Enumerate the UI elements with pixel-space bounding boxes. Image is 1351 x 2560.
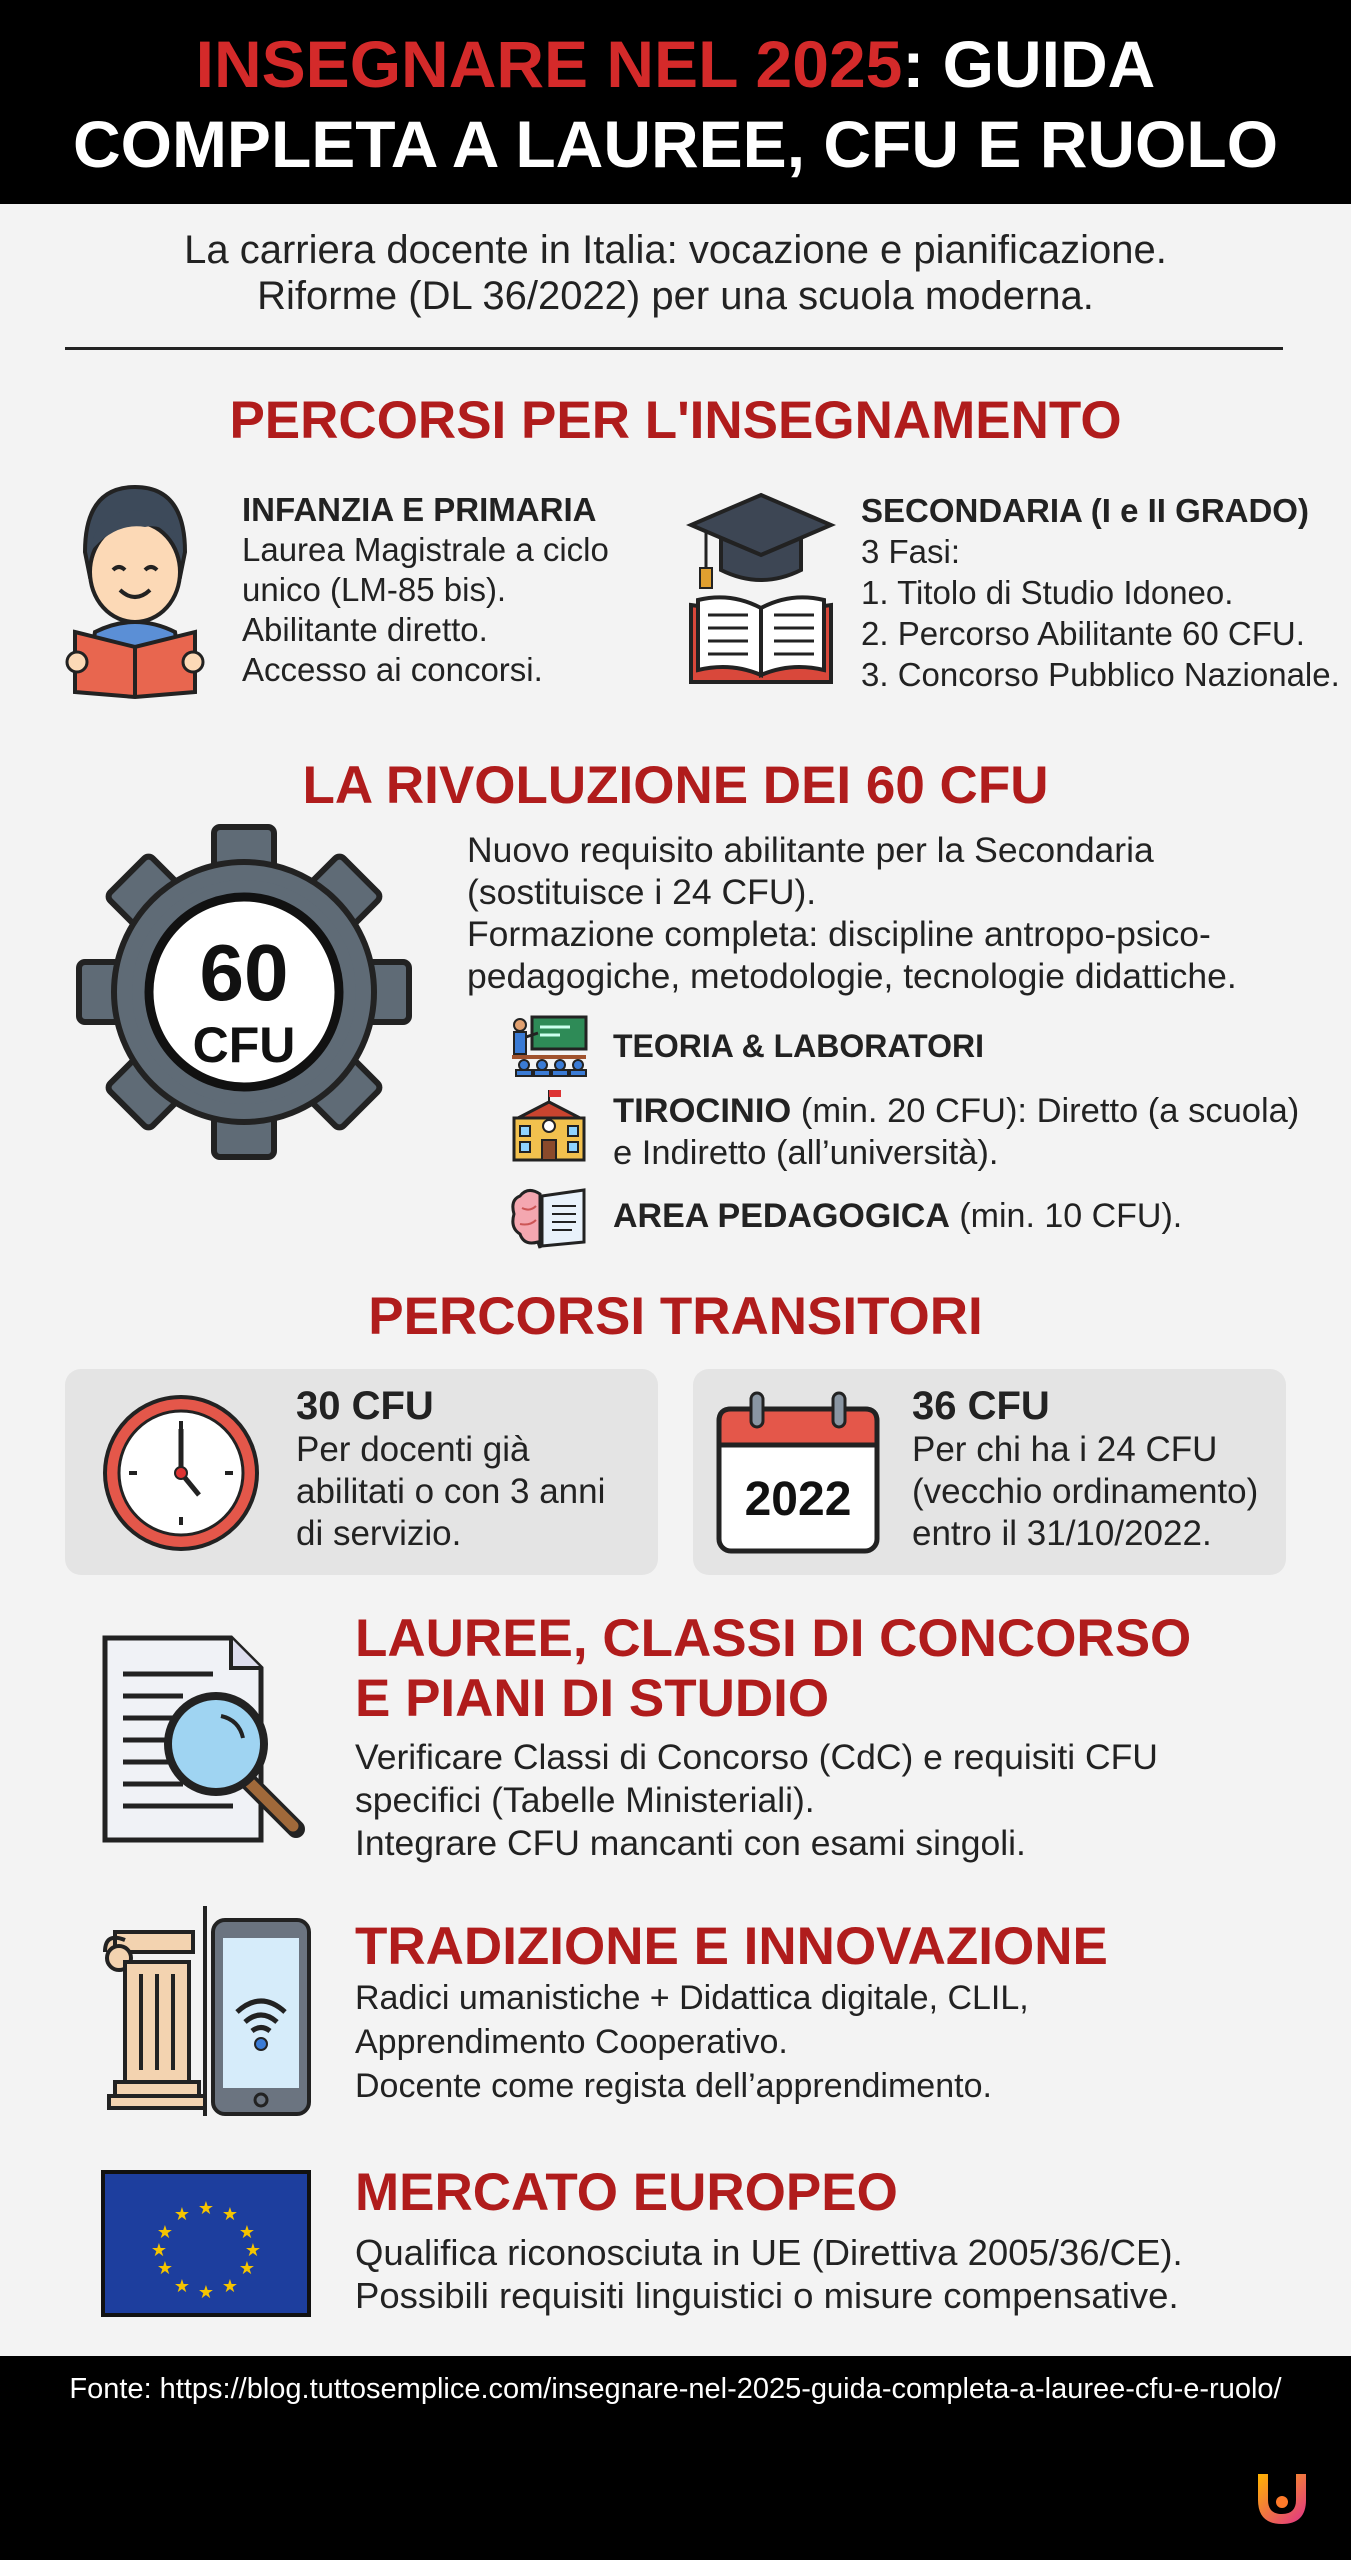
icon: document with magnifier [102, 1636, 305, 1842]
text: 36 CFU: entro il 31/10/2022. [912, 1514, 1212, 1553]
icon: teacher [512, 1016, 588, 1077]
text: tirocinio: e Indiretto (all’università). [613, 1134, 998, 1172]
text: infanzia e primaria: Abilitante diretto. [242, 611, 488, 648]
text: tradizione: Docente come regista dell’apprendimento. [355, 2067, 992, 2105]
text: infanzia e primaria: Accesso ai concorsi. [242, 651, 543, 688]
icon: child reading [66, 485, 204, 699]
text: teoria: TEORIA & LABORATORI [613, 1028, 984, 1064]
text: 60 CFU description: Formazione completa: discipline antropo-psico- [467, 914, 1211, 954]
icon: clock [103, 1395, 259, 1551]
text: secondaria [861, 492, 1340, 693]
icon: EU flag: ★ [151, 2240, 167, 2261]
heading: lauree: LAUREE, CLASSI DI CONCORSO [355, 1609, 1191, 1668]
icon: gear 60 CFU: CFU [193, 1017, 295, 1073]
heading: percorsi transitori: PERCORSI TRANSITORI [368, 1287, 983, 1346]
title: INSEGNARE NEL 2025: GUIDA [196, 27, 1155, 101]
card: 30 CFU [65, 1369, 658, 1575]
heading: lauree: E PIANI DI STUDIO [355, 1669, 829, 1728]
icon: gear 60 CFU [76, 824, 412, 1160]
text: 30 CFU [296, 1384, 605, 1553]
header band [0, 0, 1351, 204]
text: tirocinio [613, 1092, 1299, 1172]
text: tirocinio: TIROCINIO (min. 20 CFU): Diretto (a scuola) [613, 1092, 1299, 1130]
heading: tradizione: TRADIZIONE E INNOVAZIONE [355, 1917, 1108, 1976]
text: 30 CFU: di servizio. [296, 1514, 461, 1553]
icon: calendar 2022 [716, 1392, 880, 1554]
icon: EU flag: ★ [157, 2222, 173, 2243]
icon: school [512, 1090, 586, 1162]
icon: EU flag: ★ [222, 2204, 238, 2225]
text: mercato europeo [355, 2232, 1183, 2316]
icon: graduation cap and book [686, 492, 836, 684]
text: secondaria: 2. Percorso Abilitante 60 CFU. [861, 615, 1305, 652]
icon: EU flag: ★ [198, 2198, 214, 2219]
text: 36 CFU: (vecchio ordinamento) [912, 1472, 1258, 1511]
text: infanzia e primaria: unico (LM-85 bis). [242, 571, 506, 608]
icon: brain and book [511, 1188, 586, 1248]
text: 60 CFU description: (sostituisce i 24 CFU). [467, 872, 816, 912]
text: secondaria: 3. Concorso Pubblico Nazionale. [861, 656, 1340, 693]
text: mercato europeo: Qualifica riconosciuta in UE (Direttiva 2005/36/CE). [355, 2232, 1183, 2273]
text: mercato europeo: Possibili requisiti linguistici o misure compensative. [355, 2275, 1179, 2316]
title: COMPLETA A LAUREE, CFU E RUOLO [73, 107, 1278, 181]
title [73, 27, 1278, 181]
text: secondaria: 1. Titolo di Studio Idoneo. [861, 574, 1233, 611]
subtitle: La carriera docente in Italia: vocazione e pianificazione. [184, 228, 1167, 272]
icon: column and tablet [103, 1906, 311, 2116]
icon: EU flag: ★ [222, 2276, 238, 2297]
text: 30 CFU: 30 CFU [296, 1384, 434, 1428]
text: infanzia e primaria: INFANZIA E PRIMARIA [242, 491, 596, 528]
source text: Fonte: https://blog.tuttosemplice.com/insegnare-nel-2025-guida-completa-a-lauree-cfu-e-ruolo/ [69, 2373, 1282, 2405]
text: tradizione: Radici umanistiche + Didattica digitale, CLIL, [355, 1979, 1029, 2017]
heading: percorsi: PERCORSI PER L'INSEGNAMENTO [229, 391, 1122, 450]
icon: EU flag: ★ [239, 2222, 255, 2243]
text: 36 CFU: Per chi ha i 24 CFU [912, 1430, 1217, 1469]
text: 60 CFU description: Nuovo requisito abilitante per la Secondaria [467, 830, 1154, 870]
heading: mercato europeo: MERCATO EUROPEO [355, 2163, 898, 2222]
subtitle: Riforme (DL 36/2022) per una scuola moderna. [257, 274, 1094, 318]
logo [1258, 2474, 1306, 2524]
text: area pedagogica: AREA PEDAGOGICA (min. 10 CFU). [613, 1197, 1182, 1235]
text: lauree: Verificare Classi di Concorso (CdC) e requisiti CFU [355, 1737, 1158, 1777]
icon: EU flag: ★ [245, 2240, 261, 2261]
text: 36 CFU [912, 1384, 1258, 1553]
text: 36 CFU: 36 CFU [912, 1384, 1050, 1428]
text: lauree [355, 1737, 1158, 1863]
text: 60 CFU description: pedagogiche, metodologie, tecnologie didattiche. [467, 956, 1237, 996]
icon: EU flag: ★ [174, 2204, 190, 2225]
text: tradizione [355, 1979, 1029, 2105]
text: 60 CFU description [467, 830, 1237, 996]
subtitle [184, 228, 1167, 318]
text: lauree: Integrare CFU mancanti con esami singoli. [355, 1823, 1026, 1863]
icon: gear 60 CFU: 60 [200, 928, 288, 1017]
text: secondaria: 3 Fasi: [861, 533, 960, 570]
icon: calendar 2022: 2022 [745, 1473, 851, 1526]
text: infanzia e primaria [242, 491, 609, 688]
footer band [0, 2356, 1351, 2560]
text: 30 CFU: Per docenti già [296, 1430, 529, 1469]
text: 30 CFU: abilitati o con 3 anni [296, 1472, 605, 1511]
text: tradizione: Apprendimento Cooperativo. [355, 2023, 788, 2061]
text: lauree: specifici (Tabelle Ministeriali). [355, 1780, 815, 1820]
card: 36 CFU [693, 1369, 1286, 1575]
icon: EU flag: ★ [198, 2282, 214, 2303]
icon: EU flag: ★ [174, 2276, 190, 2297]
icon: EU flag: ★ [239, 2258, 255, 2279]
icon: EU flag: ★ [157, 2258, 173, 2279]
text: infanzia e primaria: Laurea Magistrale a ciclo [242, 531, 609, 568]
text: secondaria: SECONDARIA (I e II GRADO) [861, 492, 1309, 529]
heading: lauree [355, 1609, 1191, 1728]
heading: rivoluzione 60 CFU: LA RIVOLUZIONE DEI 60 CFU [302, 756, 1048, 815]
icon: EU flag [101, 2170, 311, 2317]
